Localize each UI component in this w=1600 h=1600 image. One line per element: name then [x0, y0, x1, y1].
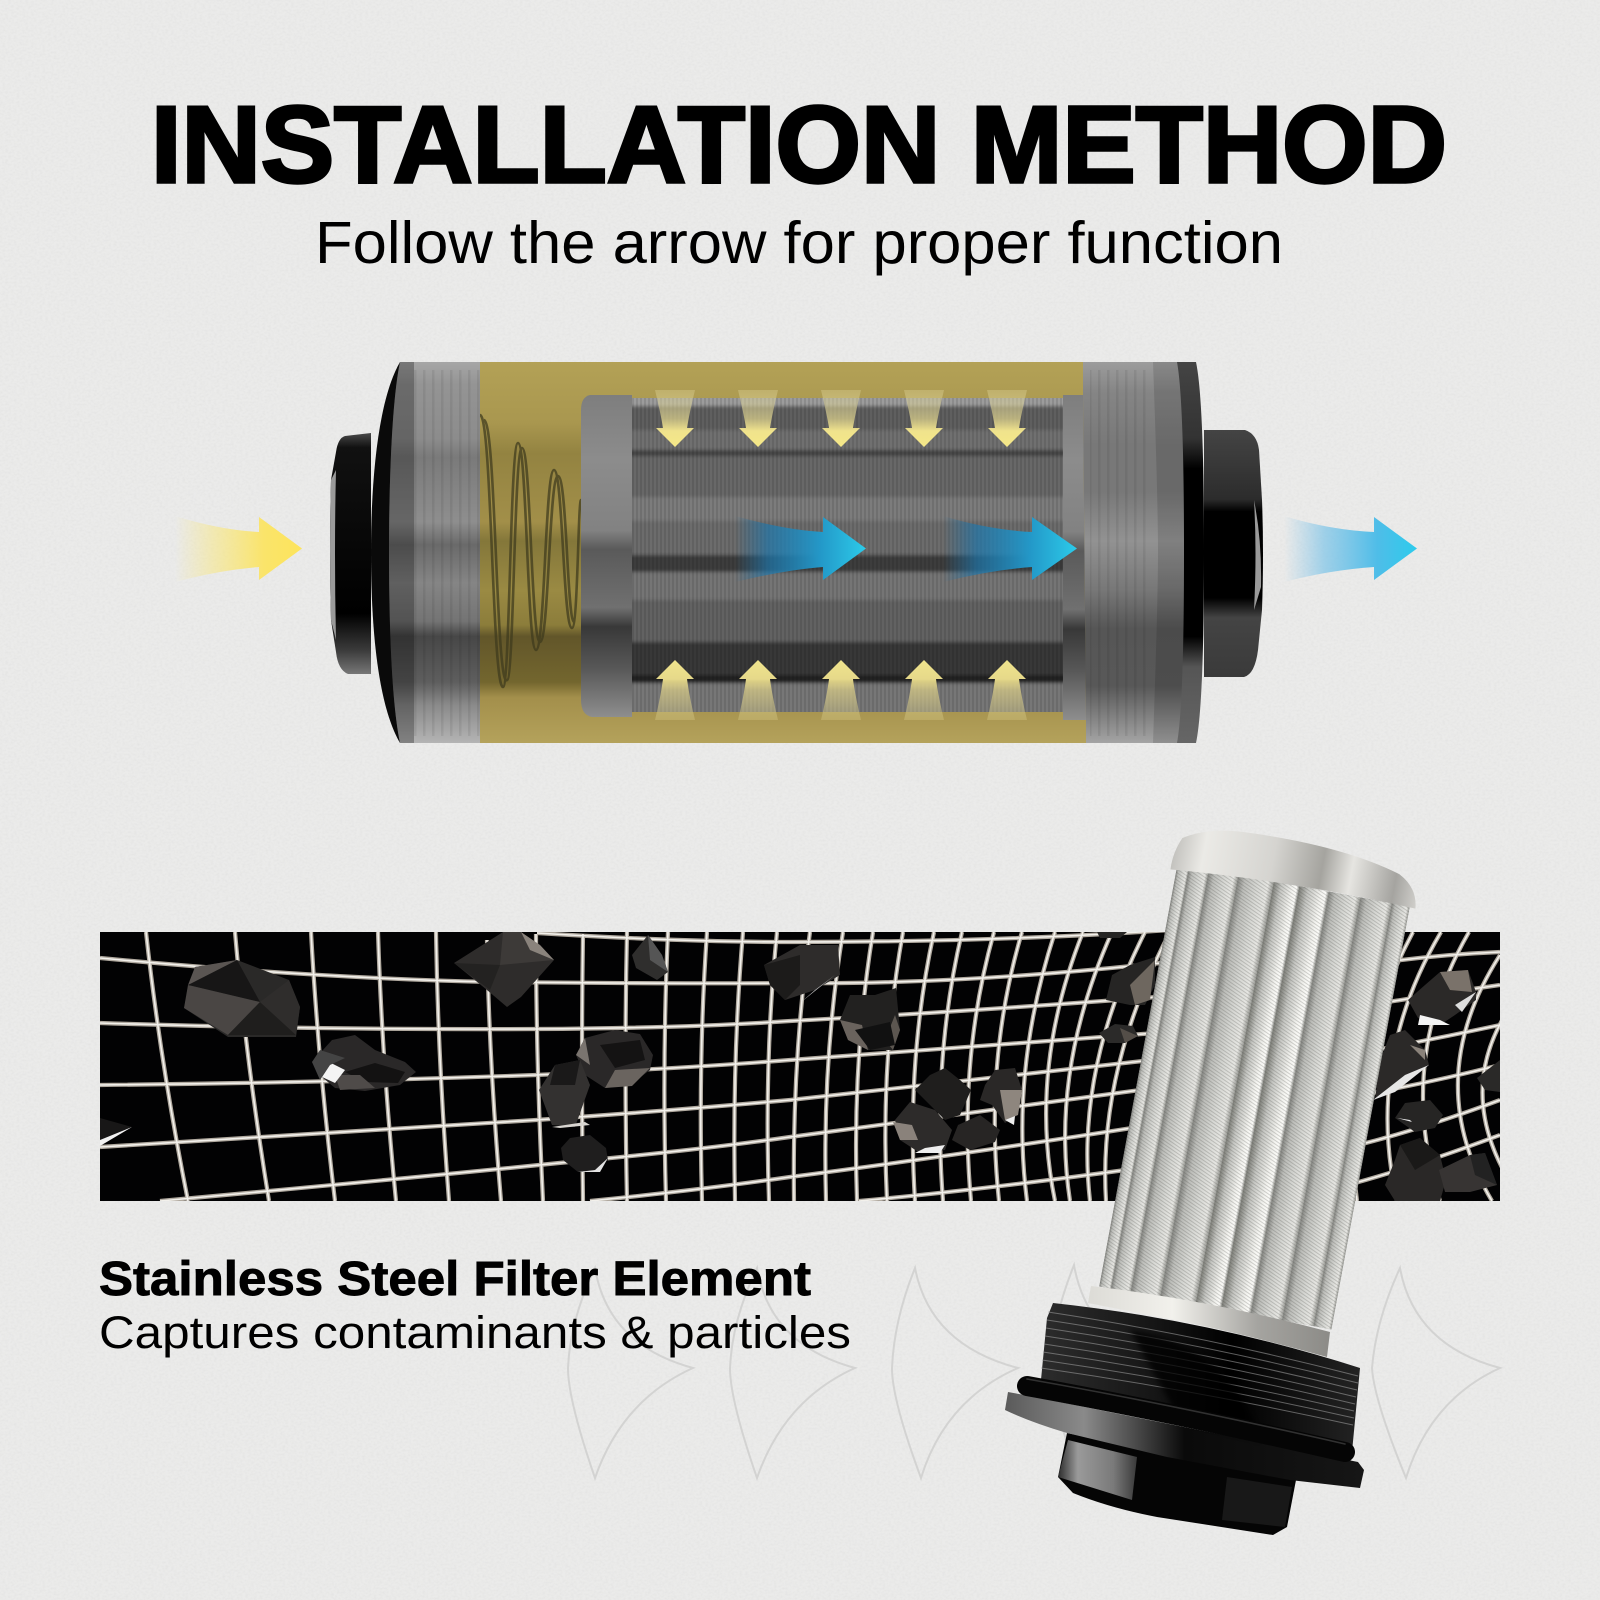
- caption heading: Stainless Steel Filter Element: [99, 1253, 811, 1306]
- right threaded body: [1083, 362, 1190, 743]
- particle: lower right rock 2: [1439, 1153, 1497, 1192]
- arrows: top row inward: [655, 390, 1027, 447]
- particle: top rock: [454, 932, 554, 1007]
- particle: cluster of rocks: [893, 1068, 1022, 1153]
- pleated mesh cylinder: [1093, 819, 1424, 1330]
- particle: right small rock: [1395, 1100, 1443, 1132]
- particle: elongated rock: [539, 1060, 590, 1128]
- arrow: blue centre 2: [943, 516, 1077, 582]
- right nut: [1204, 430, 1263, 677]
- thread body: [1040, 1303, 1360, 1452]
- inner filter left cap: [581, 395, 632, 717]
- arrows: bottom row inward: [655, 660, 1027, 720]
- particle: near filter rock: [1106, 957, 1155, 1005]
- inline filter cutaway diagram: [175, 362, 1417, 743]
- lower silver ring: [1088, 1286, 1330, 1357]
- watermark arrow outlines: [568, 1265, 1500, 1478]
- particle: round rock: [576, 1030, 653, 1088]
- right flange: [1177, 362, 1204, 743]
- caption body: Captures contaminants & particles: [99, 1307, 851, 1358]
- title: INSTALLATION METHOD: [151, 84, 1447, 206]
- left threaded body: [389, 362, 480, 743]
- particle: small dark sphere: [561, 1135, 608, 1172]
- particle: left edge shard: [100, 1118, 132, 1146]
- arrow: blue outlet: [1284, 516, 1417, 582]
- mesh panel with particles: [100, 930, 1515, 1201]
- particle: right shard: [1373, 1030, 1429, 1100]
- o-ring: [1027, 1379, 1345, 1452]
- particle: right rock top: [1408, 970, 1476, 1025]
- hex nut: [1058, 1433, 1296, 1535]
- right ring: [1153, 362, 1190, 743]
- subtitle: Follow the arrow for proper function: [315, 210, 1283, 276]
- left nut: [330, 433, 371, 674]
- spring: [480, 415, 581, 687]
- wire mesh: [100, 930, 1515, 1201]
- particle: mid rock: [764, 945, 840, 1003]
- particle: small tall rock: [632, 935, 668, 980]
- particle: flat rock with highlight: [312, 1035, 416, 1091]
- filter element product: [1005, 819, 1424, 1535]
- particle: tiny flat rock: [1099, 1024, 1138, 1043]
- arrow: blue centre 1: [735, 516, 866, 582]
- inner filter mesh: [625, 390, 1070, 723]
- flange: [1005, 1392, 1364, 1488]
- top cap: [1170, 819, 1424, 915]
- particle: boxy rock: [840, 988, 900, 1050]
- inner filter right cap: [1063, 395, 1086, 720]
- particle: large left rock: [184, 960, 300, 1037]
- particle: lower right rock: [1385, 1138, 1446, 1201]
- left flange: [371, 362, 408, 743]
- arrow: yellow inlet: [175, 516, 302, 582]
- particle: right edge rock: [1477, 1060, 1500, 1092]
- gold fuel chamber: [480, 362, 1092, 743]
- particle: top rock sliver: [1097, 932, 1127, 938]
